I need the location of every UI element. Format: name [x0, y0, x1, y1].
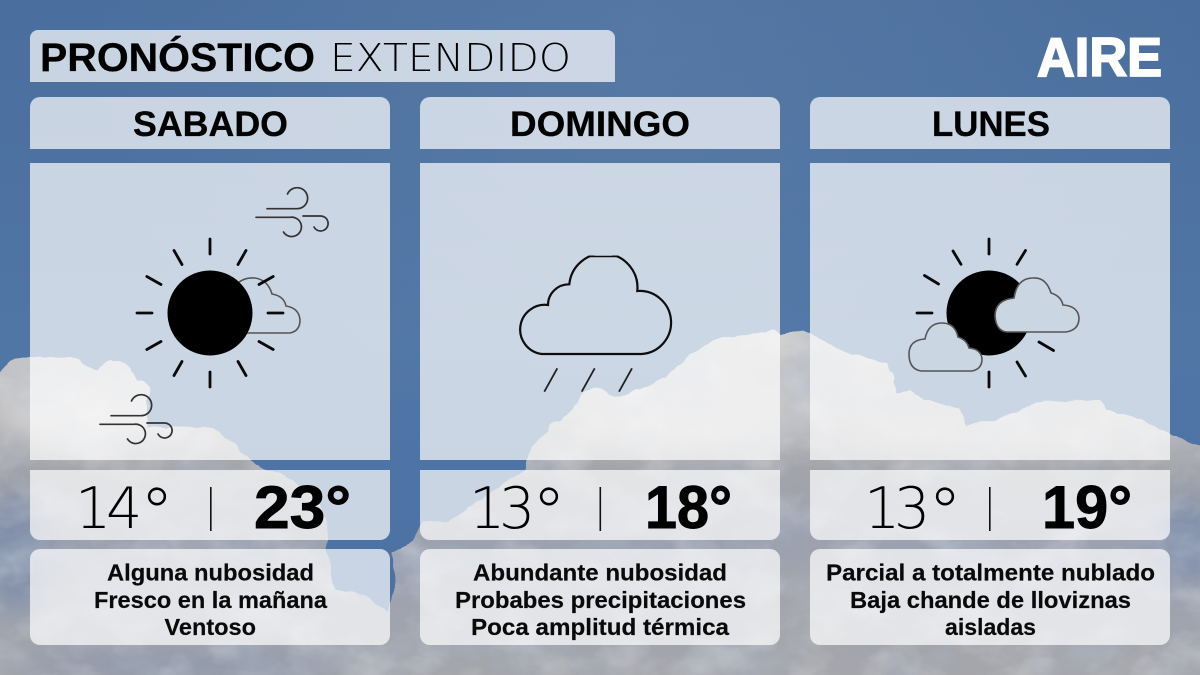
day header: domingo	[420, 97, 780, 149]
sky box: domingo	[420, 163, 780, 460]
sky box: lunes	[810, 163, 1170, 460]
panel: sabado	[30, 97, 390, 645]
panel: lunes	[810, 97, 1170, 645]
description: sabado: Ventoso	[164, 614, 256, 640]
title: light part: EXTENDIDO	[330, 36, 571, 80]
temperatures: sabado	[30, 470, 390, 553]
description: lunes: Baja chande de lloviznas	[850, 587, 1131, 613]
description: lunes: Parcial a totalmente nublado	[826, 560, 1155, 586]
description: lunes: aisladas	[945, 614, 1036, 640]
title: bold part: PRONÓSTICO	[40, 34, 315, 80]
temperatures: sabado: 1	[75, 476, 111, 542]
icon: sun with two clouds	[909, 239, 1079, 387]
temperatures: sabado: 23°	[254, 474, 351, 541]
temperatures: domingo: 18°	[645, 474, 732, 541]
description: sabado	[30, 549, 390, 645]
temperatures: lunes: 3	[894, 476, 930, 542]
background: sky and clouds	[0, 330, 1200, 675]
temperatures: lunes	[810, 470, 1170, 553]
icon: wind top	[256, 188, 328, 237]
description: sabado: Fresco en la mañana	[94, 587, 327, 613]
day header: lunes	[810, 97, 1170, 149]
day header: domingo: DOMINGO	[510, 105, 690, 144]
sky box: sabado	[30, 163, 390, 460]
temperatures: domingo: 1	[469, 476, 505, 542]
day header: sabado	[30, 97, 390, 149]
description: domingo: Poca amplitud térmica	[471, 614, 729, 640]
icon: sun with cloud and wind	[100, 188, 328, 444]
description: domingo: Probabes precipitaciones	[455, 587, 746, 613]
temperatures: lunes: 1	[864, 476, 900, 542]
day header: lunes: LUNES	[932, 105, 1050, 144]
description: lunes	[810, 549, 1170, 645]
temperatures: sabado: °	[140, 474, 174, 553]
temperatures: sabado: 4	[106, 476, 142, 542]
panel: domingo	[420, 97, 780, 645]
temperatures: domingo: °	[532, 474, 566, 553]
temperatures: domingo	[420, 470, 780, 553]
icon: rain cloud	[520, 253, 671, 392]
temperatures: domingo: 3	[499, 476, 535, 542]
temperatures: lunes: 19°	[1042, 474, 1132, 541]
temperatures: lunes: °	[928, 474, 962, 553]
description: domingo	[420, 549, 780, 645]
logo: AIRE: AIRE	[1037, 26, 1162, 88]
day header: sabado: SABADO	[133, 105, 288, 144]
title bar	[30, 30, 615, 82]
icon: wind bottom	[100, 395, 172, 444]
description: sabado: Alguna nubosidad	[107, 560, 314, 586]
description: domingo: Abundante nubosidad	[473, 560, 727, 586]
